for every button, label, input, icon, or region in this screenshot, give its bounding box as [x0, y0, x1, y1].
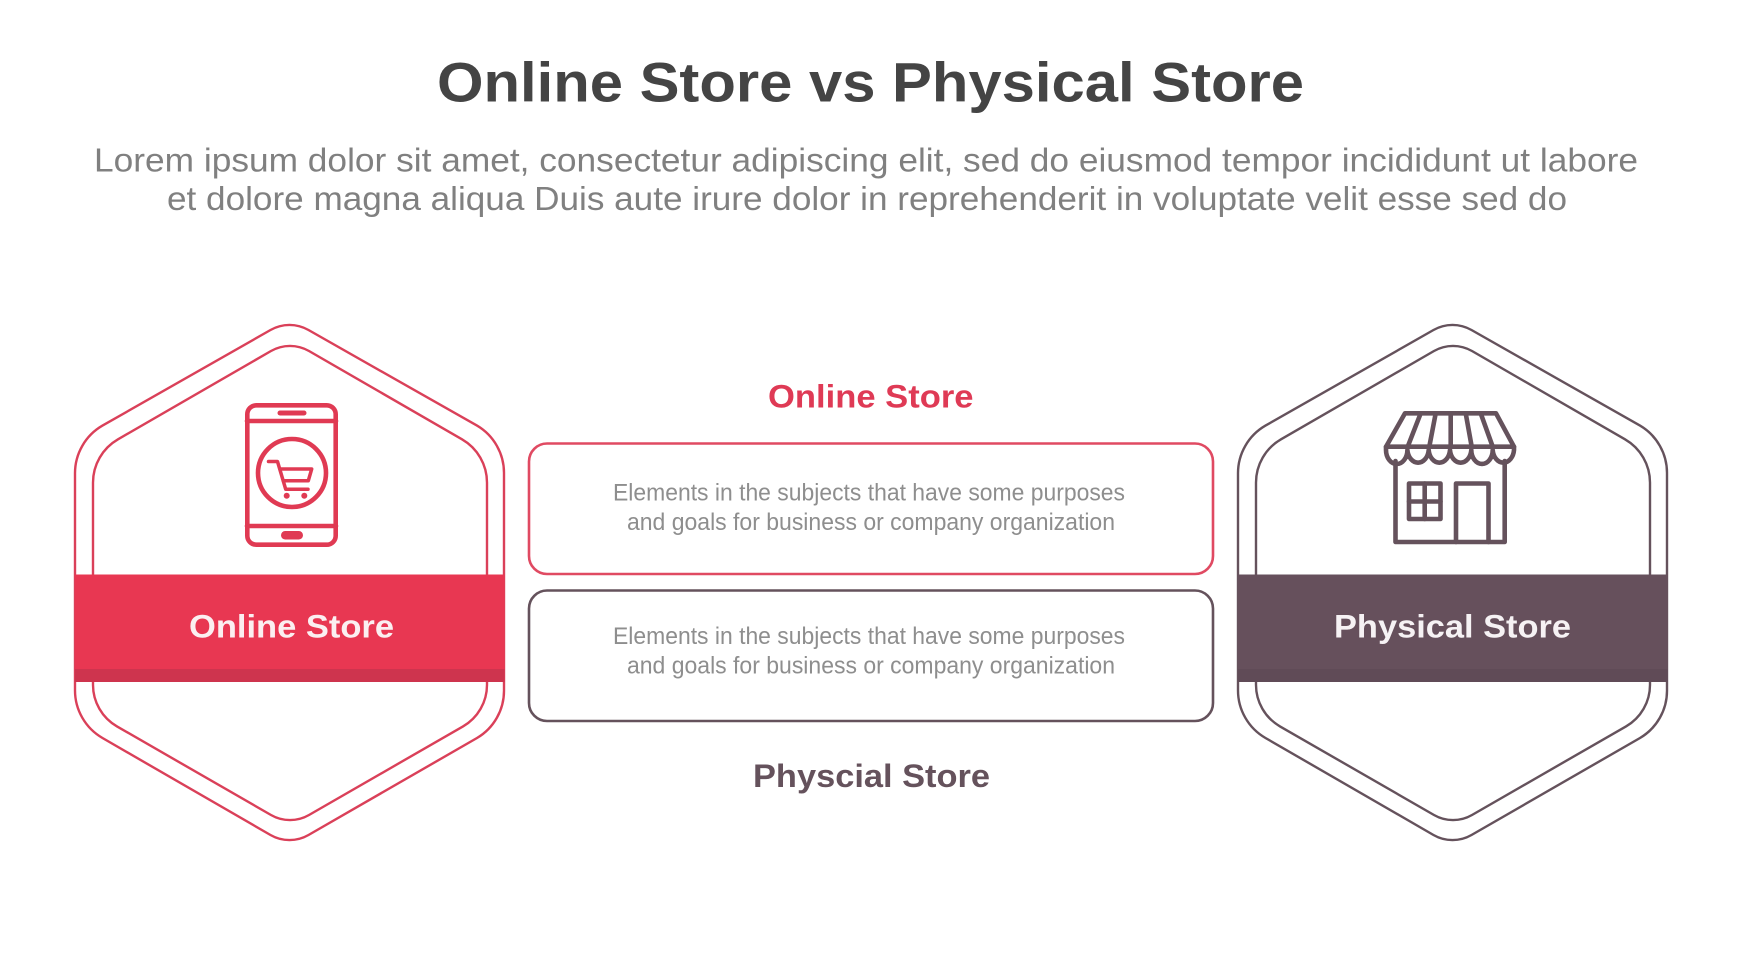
subtitle text block	[94, 142, 1638, 217]
inner hexagon outline	[93, 346, 487, 820]
banner: physical store	[1238, 574, 1668, 682]
heading: online store: Online Store	[768, 378, 974, 414]
subtitle text block: et dolore magna aliqua Duis aute irure dolor in reprehenderit in voluptate velit esse sed do	[167, 180, 1567, 217]
panel: online store description box: Elements in the subjects that have some purposes	[613, 480, 1125, 506]
heading: physical store: Physcial Store	[753, 758, 990, 794]
icon: smartphone with shopping cart	[247, 405, 336, 545]
panel: online store description box	[529, 444, 1213, 574]
panel: physical store hexagon	[1238, 325, 1668, 840]
outer hexagon outline	[75, 325, 504, 840]
panel: physical store description box	[529, 590, 1213, 721]
banner: online store: Online Store	[189, 608, 394, 644]
icon: storefront	[1386, 413, 1514, 542]
banner: online store	[75, 574, 504, 682]
panel: physical store description box: Elements in the subjects that have some purposes	[613, 623, 1125, 650]
inner hexagon outline	[1256, 346, 1650, 820]
panel: physical store description box: and goals for business or company organization	[627, 652, 1115, 680]
panel: online store hexagon	[75, 325, 504, 840]
outer hexagon outline	[1238, 325, 1667, 840]
banner: physical store: Physical Store	[1334, 608, 1571, 644]
panel: online store description box: and goals for business or company organization	[627, 509, 1115, 536]
title: Online Store vs Physical Store	[437, 50, 1304, 114]
subtitle text block: Lorem ipsum dolor sit amet, consectetur adipiscing elit, sed do eiusmod tempor incididunt ut labore	[94, 142, 1638, 178]
